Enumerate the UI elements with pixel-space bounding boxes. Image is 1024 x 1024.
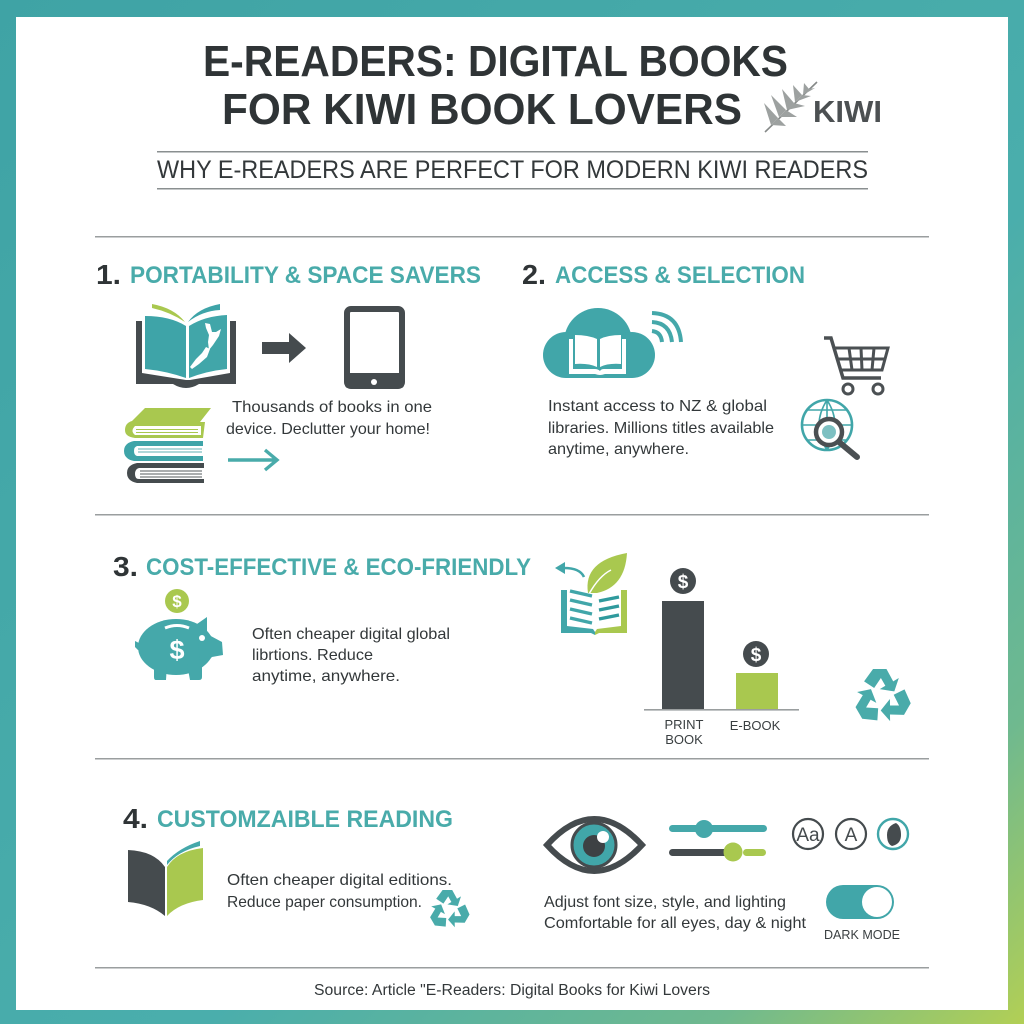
source: Source: Article "E-Readers: Digital Books for Kiwi Lovers [314, 982, 710, 999]
icon: sliders [669, 820, 767, 862]
heading: cost: 3. [113, 551, 138, 582]
icon: recycle [849, 669, 915, 727]
icon: book with leaf [555, 553, 627, 635]
icon: small recycle [426, 890, 473, 931]
heading: customizable: CUSTOMZAIBLE READING [157, 806, 453, 833]
icon: eye [547, 819, 642, 871]
icon: dark mode toggle [824, 885, 900, 942]
icon: font options: Aa [796, 825, 820, 846]
heading: portability: PORTABILITY & SPACE SAVERS [130, 262, 481, 289]
title [203, 37, 788, 134]
text: cost: Often cheaper digital global [252, 626, 450, 643]
text: adjust: Comfortable for all eyes, day & night [544, 915, 807, 932]
text: access: Instant access to NZ & global [548, 398, 767, 415]
icon: two-tone book [128, 841, 203, 916]
icon: cart [824, 338, 888, 394]
bar chart: print vs e-book: BOOK [665, 732, 703, 747]
panel: cost [113, 551, 915, 747]
text: customizable: Reduce paper consumption. [227, 894, 422, 911]
icon: piggy bank: $ [172, 592, 182, 611]
arrow: teal [228, 450, 277, 470]
heading: customizable: 4. [123, 803, 148, 834]
icon: piggy bank [135, 589, 223, 680]
text: access: anytime, anywhere. [548, 441, 689, 458]
arrow: book to tablet [262, 333, 306, 363]
text: adjust: Adjust font size, style, and lighting [544, 894, 786, 911]
text: access: libraries. Millions titles available [548, 420, 774, 437]
title: FOR KIWI BOOK LOVERS [222, 85, 742, 134]
text: adjust [544, 894, 807, 932]
text: access [548, 398, 774, 458]
heading: cost: COST-EFFECTIVE & ECO-FRIENDLY [146, 554, 531, 581]
icon: open book with NZ map [136, 304, 236, 388]
subtitle with rules: WHY E-READERS ARE PERFECT FOR MODERN KIWI READERS [157, 156, 868, 184]
bar chart: print vs e-book: $ [678, 572, 689, 593]
heading: access: 2. [522, 259, 546, 290]
title: E-READERS: DIGITAL BOOKS [203, 37, 788, 86]
icon: wifi waves [652, 313, 681, 342]
icon: globe with magnifier [802, 400, 857, 457]
bar chart: print vs e-book [644, 568, 799, 747]
text: cost: librtions. Reduce [252, 647, 373, 664]
icon: fern with KIWI label: KIWI [813, 94, 882, 129]
icon: font options [793, 819, 908, 849]
text: customizable: Often cheaper digital editions. [227, 872, 452, 889]
text: portability [226, 399, 432, 438]
panel: portability [96, 259, 481, 483]
icon: cloud with book [543, 308, 655, 378]
text: customizable [227, 872, 452, 911]
icon: tablet [345, 309, 404, 388]
bar chart: print vs e-book: E-BOOK [730, 718, 781, 733]
icon: font options: A [845, 825, 858, 846]
bar chart: print vs e-book: $ [751, 645, 762, 666]
text: portability: Thousands of books in one [232, 399, 432, 416]
panel: customizable [123, 803, 908, 942]
text: cost: anytime, anywhere. [252, 668, 400, 685]
heading: portability: 1. [96, 259, 121, 290]
text: portability: device. Declutter your home! [226, 421, 430, 438]
icon: book stack [124, 408, 211, 483]
icon: dark mode toggle: DARK MODE [824, 927, 900, 942]
bar chart: print vs e-book: PRINT [664, 717, 704, 732]
icon: fern with KIWI label [764, 82, 882, 132]
panel: access [522, 259, 888, 458]
text: cost [252, 626, 450, 685]
icon: piggy bank: $ [169, 635, 185, 665]
heading: access: ACCESS & SELECTION [555, 262, 805, 289]
